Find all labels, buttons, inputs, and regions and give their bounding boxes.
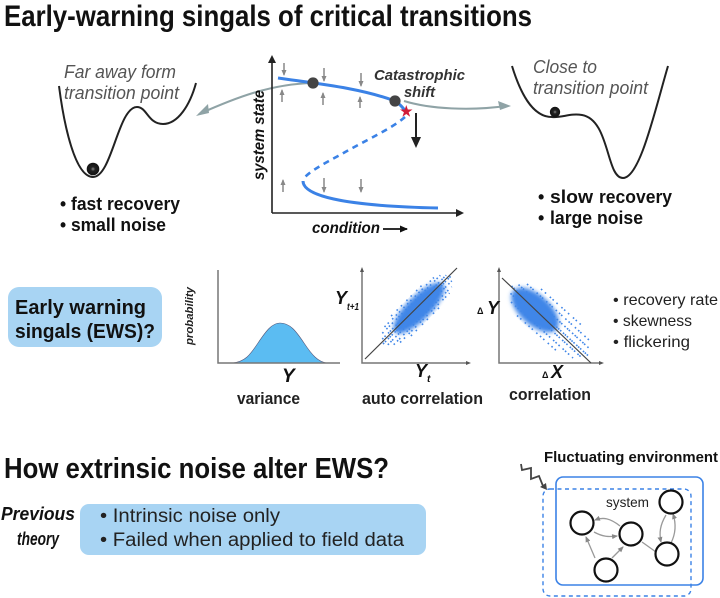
callout: EWS: singals (EWS)? — [15, 321, 155, 343]
label: close to: Close to — [533, 57, 597, 77]
axes — [499, 270, 601, 363]
trend line — [365, 268, 457, 359]
y axis label: system state — [251, 90, 268, 180]
bullet list right: large noise — [550, 208, 643, 228]
axes — [362, 270, 468, 363]
grey arrow right head — [498, 101, 511, 110]
delta Y label: Y — [487, 298, 501, 318]
point cloud — [386, 275, 452, 341]
point cloud — [503, 279, 567, 341]
diagram: system in environment — [521, 449, 718, 596]
potential well left — [59, 83, 196, 177]
Y t+1 label: t+1 — [347, 302, 359, 313]
label: far away: transition point — [64, 83, 180, 103]
environment label: Fluctuating environment — [544, 449, 718, 466]
bullet list right: slow — [550, 187, 594, 207]
label: previous theory: theory — [17, 529, 60, 549]
probability label: probability — [184, 286, 196, 346]
auto correlation label: auto correlation — [362, 389, 483, 408]
heading: extrinsic noise: How extrinsic noise alter EWS? — [4, 453, 389, 485]
network nodes — [570, 490, 682, 582]
delta X label: Δ — [542, 370, 549, 380]
label: previous theory: Previous — [1, 504, 75, 524]
panel: bifurcation chart — [196, 55, 511, 237]
upper stable branch — [278, 78, 407, 113]
system label: system — [606, 494, 649, 510]
axis heads — [268, 55, 464, 217]
bullet list right: recovery — [599, 187, 672, 207]
label: far away: Far away form — [64, 62, 176, 82]
catastrophic star: ★ — [400, 103, 413, 119]
x arrow — [383, 228, 407, 230]
callout: EWS — [8, 287, 162, 347]
bullet list right: • — [538, 187, 544, 207]
title: Early-warning singals of critical transitions — [4, 0, 532, 33]
environment box — [556, 477, 703, 585]
list: other indicators: • skewness — [613, 313, 692, 330]
bullet list left: • small noise — [60, 215, 166, 235]
lower stable branch — [303, 181, 438, 208]
state dots — [307, 77, 401, 107]
shift arrow head — [411, 137, 421, 148]
shift arrow — [415, 113, 417, 143]
catastrophic label: shift — [404, 84, 436, 101]
scatter dots — [510, 284, 590, 358]
Y t label: t — [427, 374, 431, 385]
lightning head — [540, 483, 547, 490]
scatter dots — [382, 275, 452, 345]
chart: auto correlation — [335, 267, 483, 408]
x axis label: condition — [312, 220, 380, 237]
chart: correlation — [477, 267, 604, 404]
bullet list right: • — [538, 208, 544, 228]
delta X label: X — [550, 362, 564, 382]
axis heads — [497, 267, 604, 365]
trend line — [502, 278, 591, 363]
callout: previous theory: • Failed when applied to field data — [100, 530, 404, 551]
potential well right — [512, 66, 668, 178]
list: other indicators: • flickering — [613, 334, 690, 351]
axes — [218, 270, 340, 363]
delta Y label: Δ — [477, 306, 484, 316]
callout: previous theory — [80, 504, 426, 555]
grey arrow left head — [196, 104, 209, 116]
variance label: variance — [237, 389, 300, 408]
Y t+1 label: Y — [335, 288, 347, 308]
lightning arrow — [521, 464, 543, 486]
panel: far from transition — [59, 62, 196, 235]
grey arrow left — [199, 83, 313, 114]
bullet list left: • fast recovery — [60, 194, 180, 214]
catastrophic label: Catastrophic — [374, 67, 466, 84]
list: other indicators: • recovery rate — [613, 292, 718, 309]
ball right — [550, 107, 560, 117]
small arrows — [282, 63, 361, 192]
panel: close to transition — [512, 57, 672, 228]
system dashed box — [543, 489, 691, 596]
unstable branch — [305, 117, 405, 177]
grey arrow right — [404, 101, 506, 109]
correlation label: correlation — [509, 385, 591, 404]
Y t label: Y — [415, 361, 427, 381]
axis heads — [360, 267, 471, 365]
network links — [586, 514, 675, 558]
callout: previous theory: • Intrinsic noise only — [100, 506, 281, 527]
label: close to: transition point — [533, 78, 649, 98]
axes — [272, 60, 460, 213]
link — [642, 542, 656, 552]
callout: EWS: Early warning — [15, 297, 146, 319]
Y label: Y — [282, 366, 297, 387]
ball left — [87, 163, 99, 175]
chart: variance — [184, 270, 340, 408]
bell curve — [232, 323, 327, 363]
